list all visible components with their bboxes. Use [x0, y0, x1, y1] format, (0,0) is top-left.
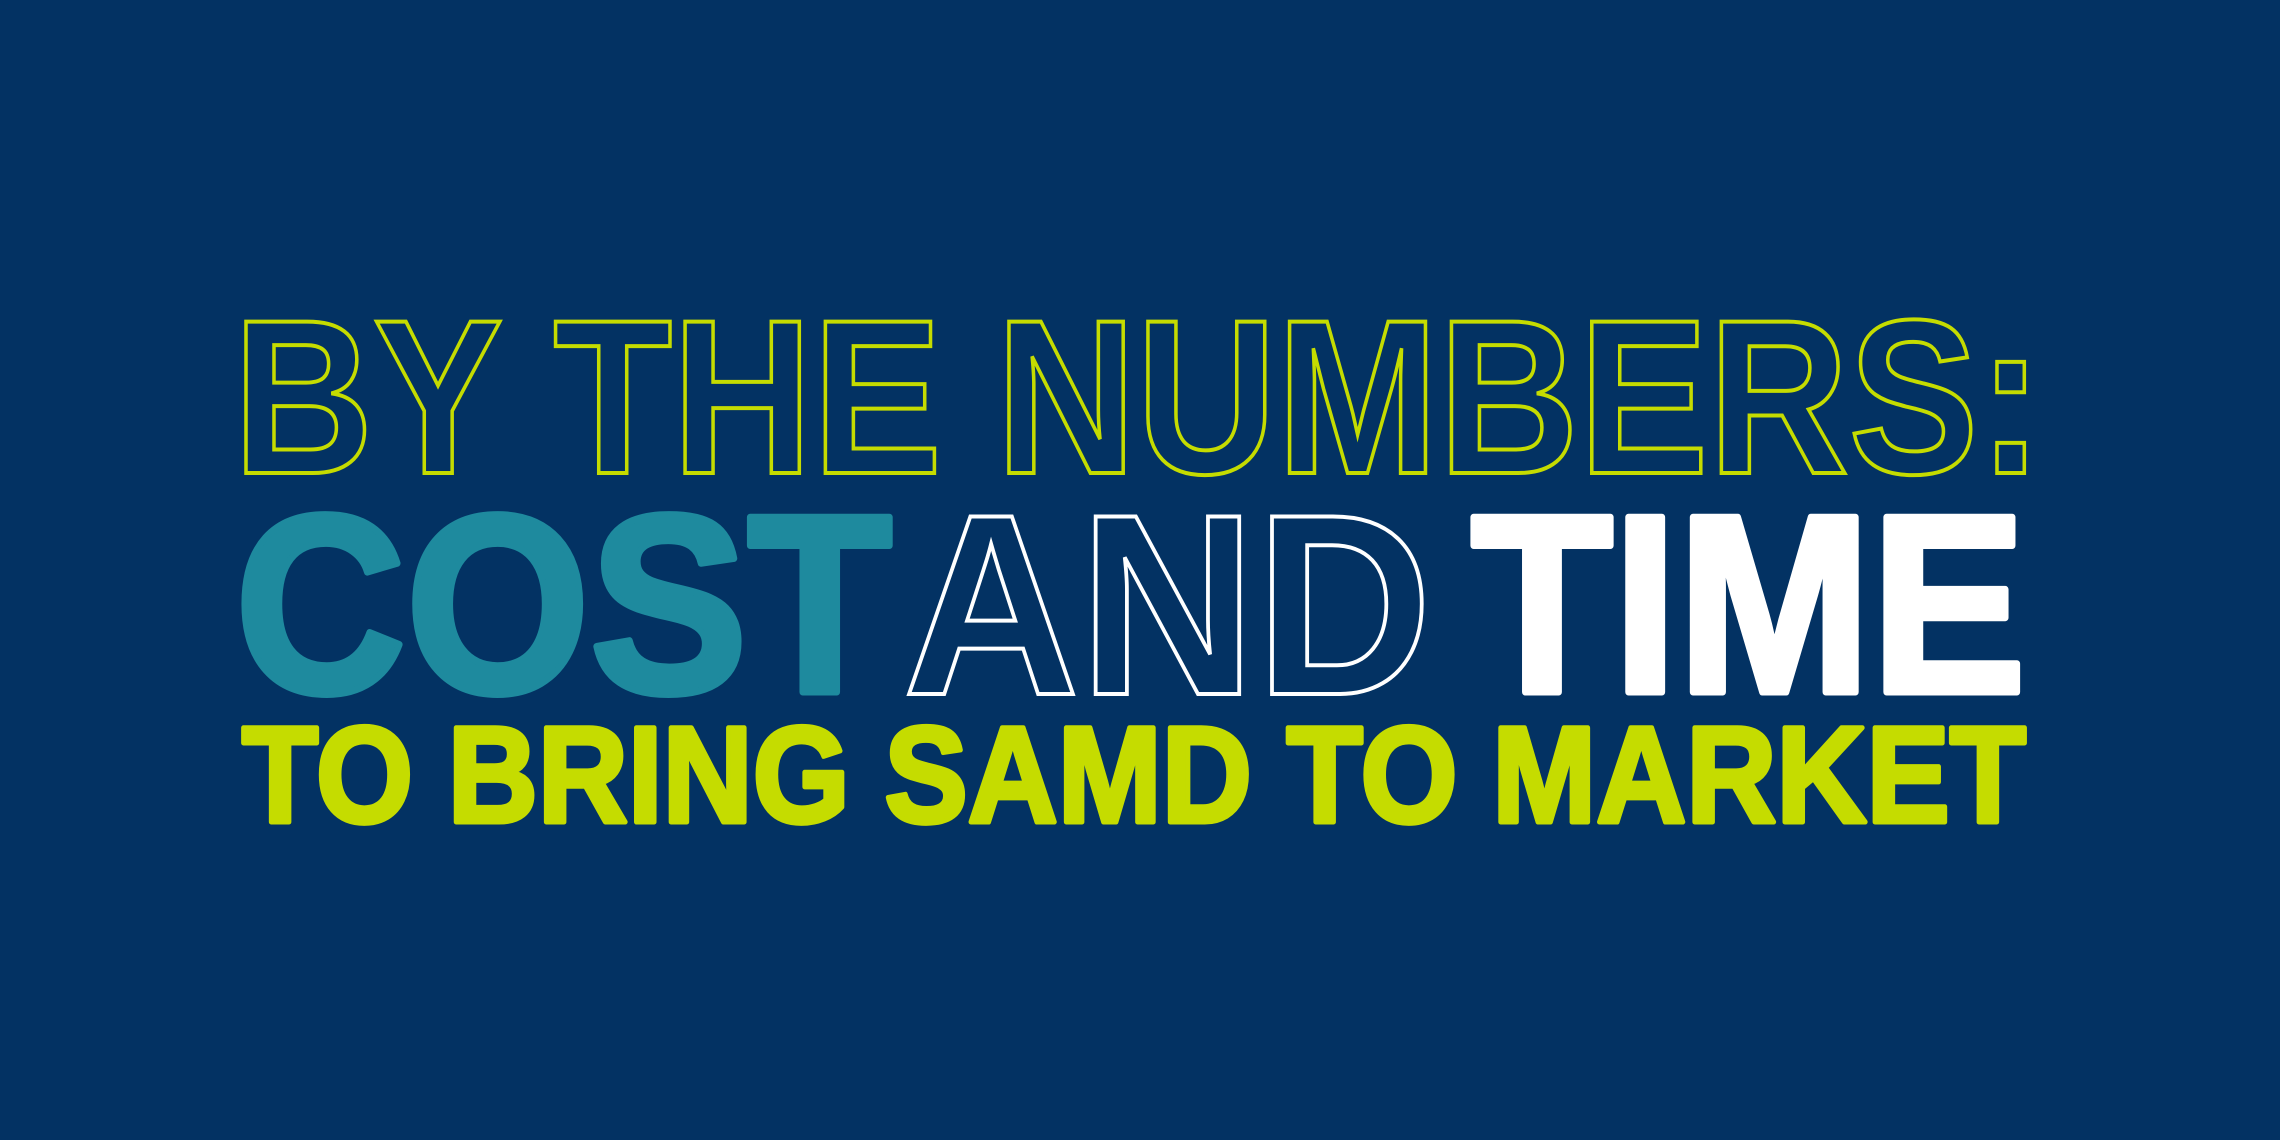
subheading: TO BRING SAMD TO MARKET: TO BRING SAMD TO MARKET [242, 699, 2026, 852]
heading line 2: COST AND TIME [235, 460, 2026, 749]
word: TIME (white): TIME [1471, 462, 2026, 746]
word: COST (teal): COST [235, 462, 892, 746]
heading line 1: BY THE NUMBERS (outlined lime): BY THE NUMBERS: [233, 274, 2043, 520]
word: AND (white outline): AND [903, 460, 1432, 749]
